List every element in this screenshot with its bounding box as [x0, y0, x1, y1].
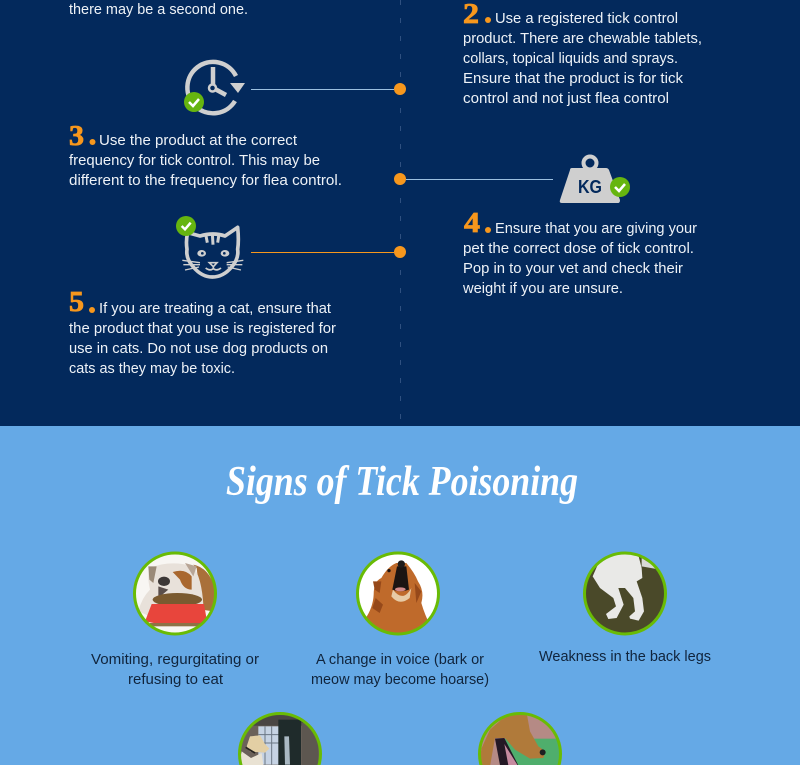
- title: Signs of Tick Poisoning: [226, 459, 578, 505]
- connector: timeline to weight: [394, 173, 553, 185]
- caption: change in voice: meow may become hoarse): [311, 671, 489, 688]
- step 2 text: product. There are chewable tablets,: [463, 30, 702, 47]
- step 2 text: Use a registered tick control: [495, 10, 678, 27]
- photo: dog back legs on grass: [583, 551, 667, 636]
- step 3 text: frequency for tick control. This may be: [69, 152, 320, 169]
- step 5 text: [69, 287, 336, 377]
- panel: signs of tick poisoning: [0, 426, 800, 765]
- step 5 text: 5: [69, 287, 84, 318]
- step 5 text: the product that you use is registered for: [69, 320, 336, 337]
- icon: KG weight: KG: [578, 177, 602, 197]
- caption: change in voice: A change in voice (bark or: [316, 651, 484, 668]
- photo: panting brown dog: [478, 712, 562, 765]
- caption: vomiting: [91, 651, 259, 688]
- step 3 text: [69, 121, 342, 189]
- step 5 text: use in cats. Do not use dog products on: [69, 340, 328, 357]
- photo: labrador by window: [238, 712, 322, 765]
- icon: clock with refresh arrow: [184, 62, 245, 113]
- step 3 text: different to the frequency for flea control.: [69, 172, 342, 189]
- step 2 text: control and not just flea control: [463, 90, 669, 107]
- step 2 text: [463, 0, 702, 107]
- step 5 text: cats as they may be toxic.: [69, 360, 235, 377]
- caption: change in voice: [311, 651, 489, 688]
- step 1 text ending: there may be a second one.: [69, 1, 248, 18]
- step 4 text: [462, 208, 697, 297]
- photo: bulldog with red bowl: [133, 552, 217, 636]
- step 4 text: weight if you are unsure.: [462, 280, 623, 297]
- connector: clock to timeline: [251, 83, 406, 95]
- caption: weakness: Weakness in the back legs: [539, 648, 711, 665]
- icon: KG weight: [560, 156, 630, 203]
- caption: vomiting: refusing to eat: [128, 671, 224, 688]
- icon: cat face: [176, 216, 243, 277]
- step 3 text: Use the product at the correct: [99, 132, 298, 149]
- connector: cat to timeline: [251, 246, 406, 258]
- step 2 text: Ensure that the product is for tick: [463, 70, 683, 87]
- step 5 text: If you are treating a cat, ensure that: [99, 300, 332, 317]
- step 4 text: pet the correct dose of tick control.: [463, 240, 694, 257]
- photo: barking golden retriever: [356, 552, 440, 638]
- step 3 text: 3: [69, 121, 84, 152]
- step 4 text: Ensure that you are giving your: [495, 220, 697, 237]
- caption: vomiting: Vomiting, regurgitating or: [91, 651, 259, 668]
- panel: tick prevention steps: [0, 0, 800, 426]
- step 4 text: Pop in to your vet and check their: [463, 260, 683, 277]
- step 4 text: 4: [464, 208, 480, 239]
- step 2 text: collars, topical liquids and sprays.: [463, 50, 678, 67]
